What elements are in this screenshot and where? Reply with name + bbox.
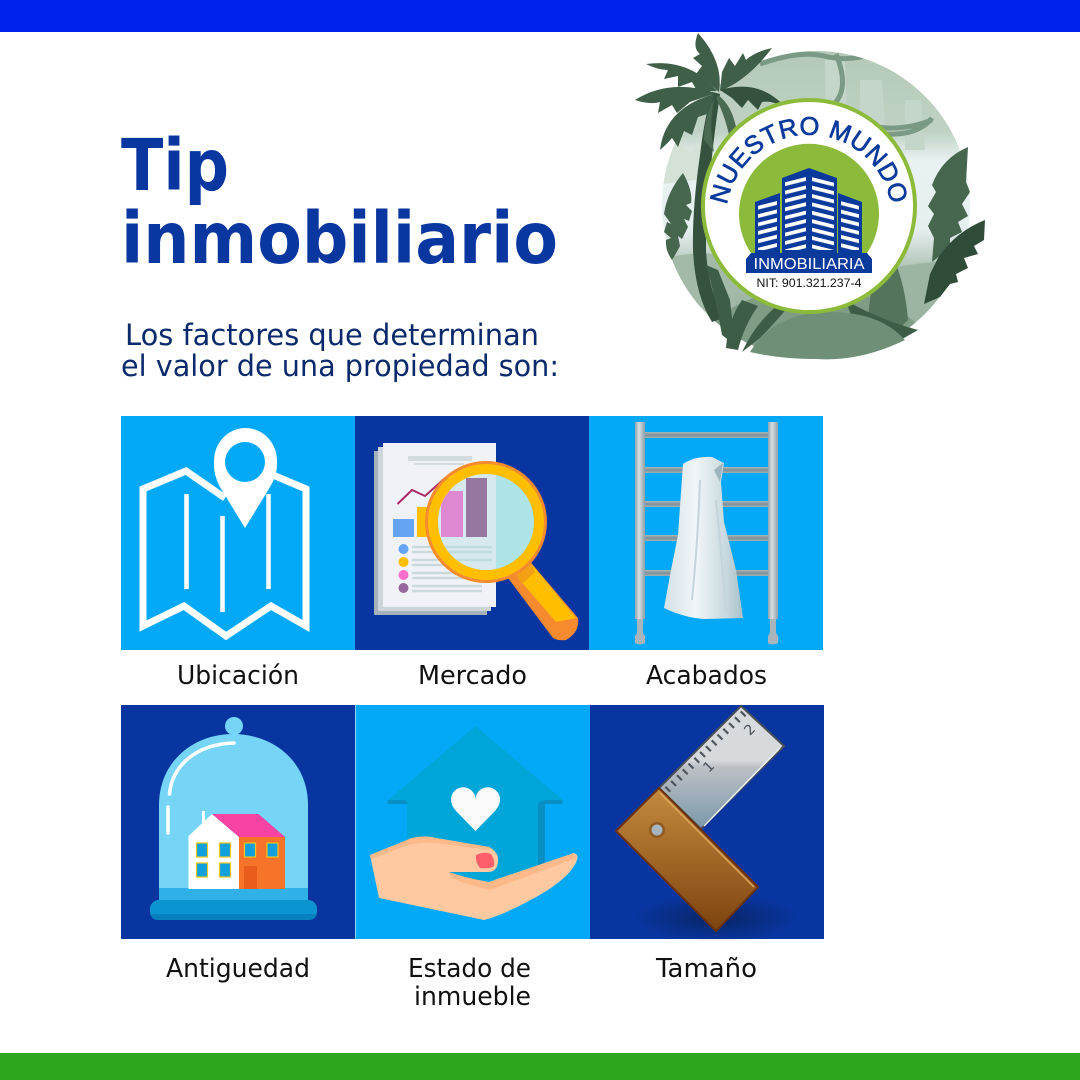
left jungle leaf <box>664 173 692 260</box>
label: Estado de inmueble: Estado de <box>408 954 531 984</box>
top bar <box>0 0 1080 32</box>
icon: ruler: 2 <box>741 721 759 739</box>
title: inmobiliario <box>121 197 558 280</box>
label: Estado de inmueble: inmueble <box>414 982 531 1012</box>
label: Ubicación: Ubicación <box>177 661 299 691</box>
label: Estado de inmueble <box>408 954 531 1012</box>
icon: white towel <box>664 457 743 619</box>
icon: location pin <box>214 428 277 528</box>
icon: magnifying glass <box>425 461 578 640</box>
buildings <box>755 168 862 253</box>
jungle background circle <box>660 51 970 368</box>
ground grass <box>750 312 905 359</box>
lower foliage <box>706 265 792 352</box>
panel: Antiguedad <box>121 705 355 939</box>
panel: Estado de inmueble <box>356 705 590 939</box>
panel: Mercado <box>355 416 589 650</box>
green inner disc <box>739 144 879 253</box>
icon: wooden handle <box>616 788 758 931</box>
icon: folded map <box>143 471 306 636</box>
subtitle <box>121 318 559 383</box>
icon: house arrow with heart <box>387 726 563 880</box>
label: Tamaño: Tamaño <box>655 954 757 984</box>
NIT text: NIT: 901.321.237-4 <box>756 276 862 290</box>
subtitle: el valor de una propiedad son: <box>121 349 559 383</box>
palm tree <box>635 33 786 322</box>
badge circle <box>703 100 915 312</box>
title: Tip <box>121 124 229 207</box>
icon: towel rail <box>635 422 778 644</box>
label: Antiguedad: Antiguedad <box>166 954 310 984</box>
bottom bar <box>0 1053 1080 1080</box>
label: Acabados: Acabados <box>646 661 767 691</box>
curved logo name: NUESTRO MUNDO <box>710 116 907 204</box>
title <box>121 124 558 280</box>
icon: glass dome <box>150 717 317 920</box>
panel: Ubicación <box>121 416 355 650</box>
panel: Acabados <box>589 416 823 650</box>
logo: Nuestro Mundo Inmobiliaria <box>635 33 985 360</box>
icon: report document <box>374 443 496 615</box>
icon: ruler: 1 <box>700 758 718 776</box>
right jungle leaves <box>845 147 985 346</box>
icon: ruler <box>659 706 784 829</box>
subtitle: Los factores que determinan <box>125 318 539 352</box>
panel: Tamaño <box>590 705 824 942</box>
icon: open hand <box>370 836 578 920</box>
icon: house <box>188 811 285 889</box>
inmobiliaria banner: INMOBILIARIA <box>754 256 865 273</box>
label: Mercado: Mercado <box>418 661 527 691</box>
icon: ruler shadow <box>634 894 798 942</box>
